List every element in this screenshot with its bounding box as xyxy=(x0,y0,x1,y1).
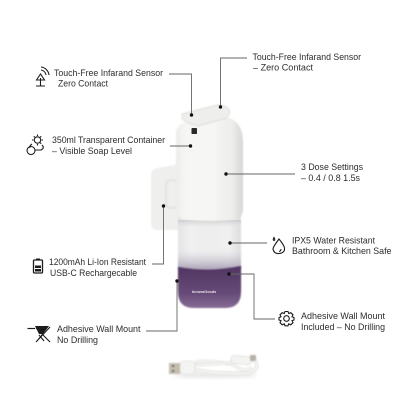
icon: cloud and sun xyxy=(27,134,43,154)
callout: water resistant xyxy=(292,234,392,256)
callout: sensor left: Zero Contact xyxy=(58,78,108,88)
callout: water resistant: IPX5 Water Resistant xyxy=(292,234,375,246)
callout: container: 350ml Transparent Container xyxy=(52,134,165,145)
frosted container xyxy=(178,214,241,292)
callout: dose settings: – 0.4 / 0.8 1.5s xyxy=(301,172,360,183)
icon: gear xyxy=(279,312,294,326)
callout: battery: USB-C Rechargecable xyxy=(50,267,137,278)
icon: no drill xyxy=(28,326,50,342)
callout: sensor left xyxy=(54,67,163,88)
frosted fade above soap xyxy=(178,250,241,269)
icon: water drop xyxy=(273,238,285,254)
shadow under white body xyxy=(178,220,241,228)
callout: dose settings xyxy=(301,161,363,183)
soap level xyxy=(178,266,241,308)
wall mount plate xyxy=(151,164,180,230)
callout: water resistant: Bathroom & Kitchen Safe xyxy=(292,245,392,256)
callout: wall mount right: Included – No Drilling xyxy=(301,321,385,332)
leader lines xyxy=(146,58,295,331)
callout: wall mount left xyxy=(57,323,141,345)
callout: wall mount left: Adhesive Wall Mount xyxy=(57,323,141,334)
icon: battery xyxy=(34,258,42,273)
callout: wall mount right: Adhesive Wall Mount xyxy=(301,310,385,321)
callout: wall mount left: No Drilling xyxy=(57,334,98,345)
callout: sensor right: Touch-Free Infarand Sensor xyxy=(252,51,361,62)
callout: battery: 1200mAh Li-Ion Resistant xyxy=(49,256,146,267)
brand mark: InnovaGoods xyxy=(192,290,216,294)
icon: sensor tower xyxy=(36,67,49,86)
usb cable xyxy=(169,355,257,378)
callout: wall mount right xyxy=(301,310,385,332)
sensor window xyxy=(192,128,197,134)
callout: sensor right: – Zero Contact xyxy=(253,62,313,72)
callout: sensor right xyxy=(252,51,361,72)
soap dispenser xyxy=(176,105,243,308)
sensor head xyxy=(182,105,230,126)
white upper body xyxy=(176,117,243,221)
callout: container: – Visible Soap Level xyxy=(52,145,132,156)
callout: sensor left: Touch-Free Infarand Sensor xyxy=(54,67,163,78)
callout: battery xyxy=(49,256,146,278)
callout: container xyxy=(52,134,165,156)
callout: dose settings: 3 Dose Settings xyxy=(301,161,363,172)
